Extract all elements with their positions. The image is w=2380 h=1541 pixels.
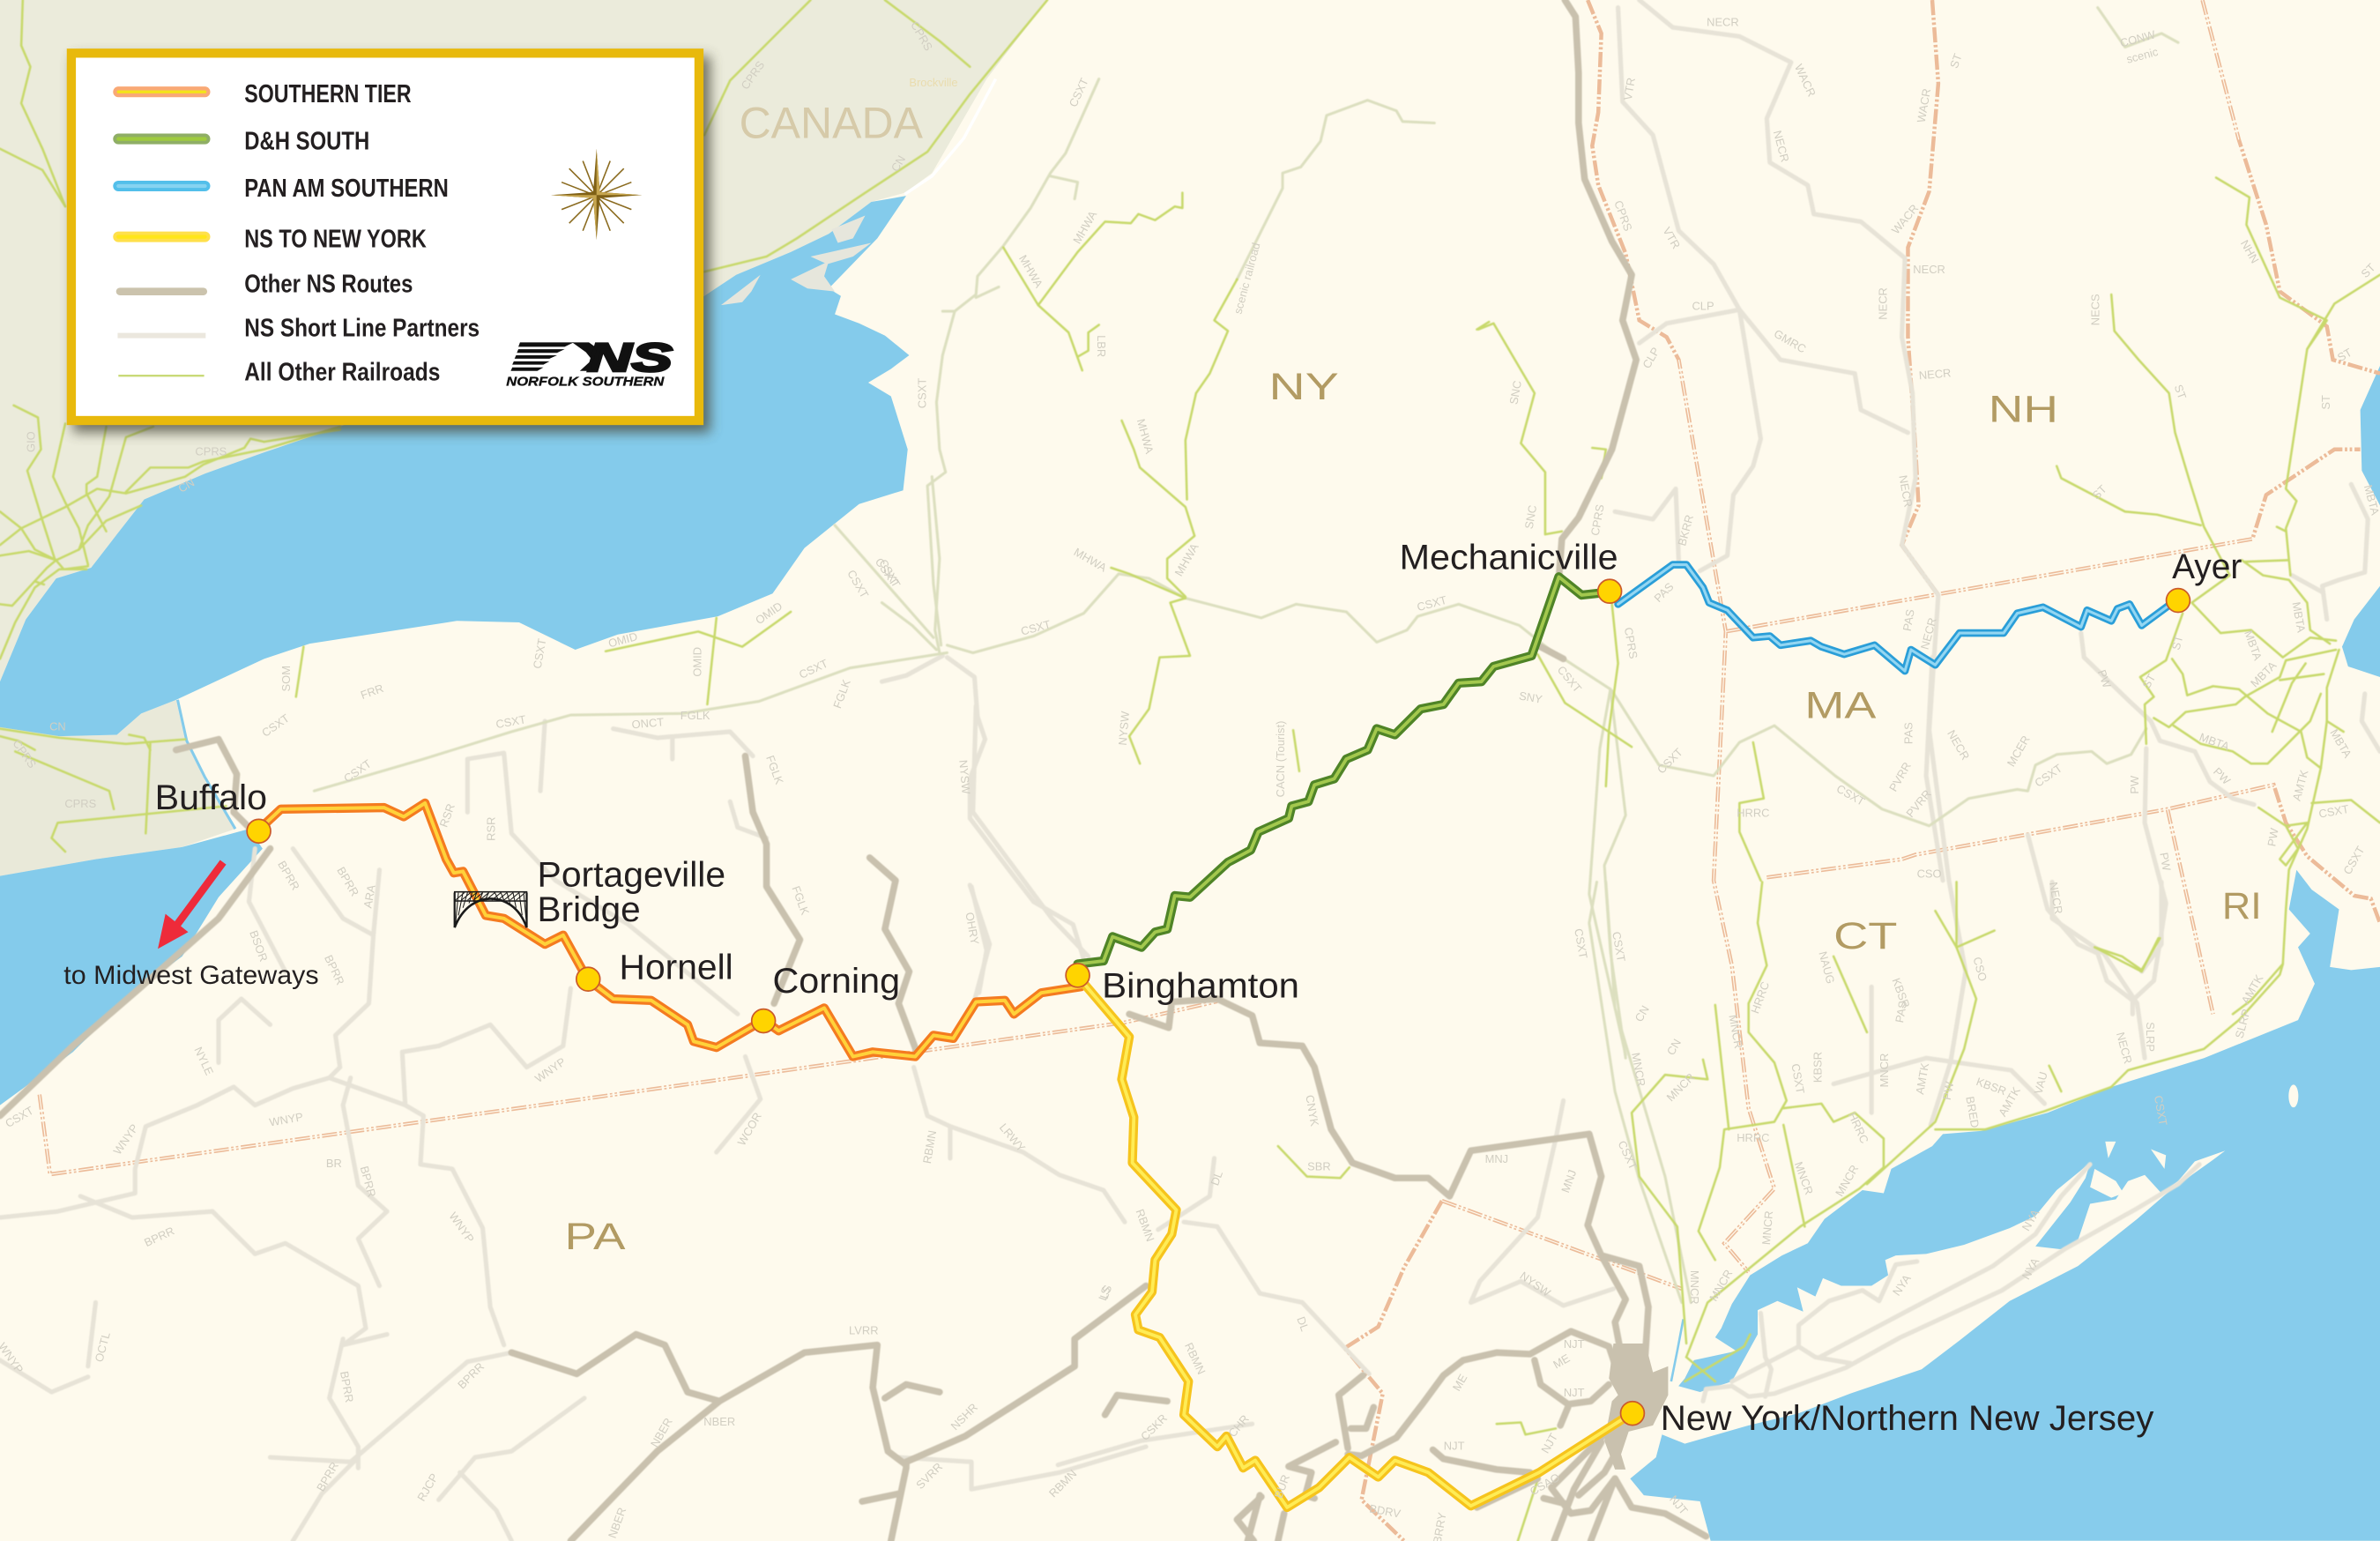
small railroad reporting-mark labels: FGLK bbox=[830, 677, 853, 711]
land: Long Island bbox=[1662, 1142, 2225, 1444]
small railroad reporting-mark labels: PVRR bbox=[1886, 760, 1914, 793]
small railroad reporting-mark labels: ST bbox=[2335, 346, 2354, 364]
small railroad reporting-mark labels: ME bbox=[1450, 1372, 1470, 1393]
label: Portageville: Portageville bbox=[538, 856, 725, 895]
small railroad reporting-mark labels: BUR bbox=[1272, 1473, 1292, 1500]
small railroad reporting-mark labels: NJT bbox=[1564, 1386, 1585, 1399]
small railroad reporting-mark labels: NAUG bbox=[1816, 950, 1837, 985]
small railroad reporting-mark labels: NECS bbox=[2088, 294, 2101, 325]
small railroad reporting-mark labels: NECR bbox=[1945, 727, 1972, 763]
Shelter Island area bbox=[2105, 1142, 2116, 1158]
small railroad reporting-mark labels: MNCR bbox=[1663, 1070, 1697, 1104]
small railroad reporting-mark labels: HRRC bbox=[1846, 1110, 1871, 1145]
small railroad reporting-mark labels: NYLE bbox=[191, 1045, 216, 1077]
small railroad reporting-mark labels: OHRY bbox=[963, 912, 982, 946]
label: CT: CT bbox=[1833, 915, 1897, 957]
small railroad reporting-mark labels: MHWA bbox=[1134, 417, 1157, 456]
label: Hornell: Hornell bbox=[620, 949, 733, 987]
small railroad reporting-mark labels: MCER bbox=[2004, 733, 2033, 769]
St. Lawrence shoreline highlight bbox=[904, 79, 996, 194]
small railroad reporting-mark labels: ST bbox=[2090, 482, 2109, 502]
small railroad reporting-mark labels: RJCP bbox=[414, 1471, 441, 1503]
small railroad reporting-mark labels: CSXT bbox=[1555, 663, 1584, 695]
small railroad reporting-mark labels: CSO bbox=[1970, 956, 1990, 983]
small railroad reporting-mark labels: RSR bbox=[436, 802, 457, 829]
legend panel bbox=[71, 53, 710, 433]
legend label: NS Short Line Partners: NS Short Line Partners bbox=[244, 314, 480, 342]
small railroad reporting-mark labels: NECR bbox=[1896, 474, 1915, 508]
small railroad reporting-mark labels: MBTA bbox=[2248, 659, 2280, 689]
icon: Portageville Bridge bbox=[455, 892, 527, 927]
small railroad reporting-mark labels: NECR bbox=[1876, 287, 1889, 320]
legend label: Pan Am Southern: PAN AM SOUTHERN bbox=[244, 175, 449, 203]
small railroad reporting-mark labels: RBMN bbox=[1134, 1207, 1157, 1243]
small railroad reporting-mark labels: NJT bbox=[1564, 1337, 1585, 1351]
route: Pan Am Southern bbox=[1618, 565, 2176, 671]
swatch: Other NS Routes bbox=[120, 289, 204, 294]
small railroad reporting-mark labels: BPRR bbox=[334, 865, 361, 898]
small railroad reporting-mark labels: OMID bbox=[606, 629, 639, 650]
swatch: D&H South bbox=[118, 136, 205, 142]
small railroad reporting-mark labels: OMID bbox=[753, 599, 785, 627]
small railroad reporting-mark labels: CSO bbox=[1917, 867, 1942, 880]
small railroad reporting-mark labels: CSXT bbox=[876, 557, 904, 590]
small railroad reporting-mark labels: FGLK bbox=[763, 754, 786, 786]
small railroad reporting-mark labels: SOM bbox=[279, 666, 293, 691]
small railroad reporting-mark labels: BR bbox=[326, 1157, 342, 1170]
small railroad reporting-mark labels: RBMN bbox=[1046, 1467, 1079, 1500]
small railroad reporting-mark labels: WACR bbox=[1889, 202, 1921, 236]
small railroad reporting-mark labels: WCOR bbox=[734, 1110, 764, 1148]
small railroad reporting-mark labels: OCTL bbox=[92, 1330, 113, 1364]
small railroad reporting-mark labels: SNY bbox=[1518, 689, 1543, 706]
route: D&H South bbox=[1078, 577, 1609, 964]
label: to Midwest Gateways: to Midwest Gateways bbox=[63, 962, 319, 990]
label: Mechanicville: Mechanicville bbox=[1400, 539, 1618, 577]
small railroad reporting-mark labels: NJT bbox=[1667, 1493, 1691, 1517]
small railroad reporting-mark labels: CSXT bbox=[915, 378, 928, 408]
small railroad reporting-mark labels: NECR bbox=[1918, 366, 1952, 382]
small railroad reporting-mark labels: CSXT bbox=[1019, 617, 1052, 638]
logo stripes bbox=[510, 342, 574, 371]
small railroad reporting-mark labels: HRRC bbox=[1748, 979, 1772, 1016]
small railroad reporting-mark labels: FRR bbox=[359, 681, 385, 702]
small railroad reporting-mark labels: Brockville bbox=[909, 76, 958, 89]
region: Canada near Buffalo bbox=[0, 700, 235, 876]
icon: compass rose bbox=[551, 149, 642, 240]
small railroad reporting-mark labels: WNYP bbox=[268, 1110, 304, 1129]
small railroad reporting-mark labels: DL bbox=[1294, 1314, 1312, 1333]
small railroad reporting-mark labels: PAS bbox=[1902, 722, 1915, 744]
small railroad reporting-mark labels: VTR bbox=[1621, 77, 1638, 101]
small railroad reporting-mark labels: CSXT bbox=[2317, 802, 2350, 821]
small railroad reporting-mark labels: CSXT bbox=[1834, 782, 1867, 808]
small railroad reporting-mark labels: LS bbox=[1097, 1283, 1114, 1301]
small railroad reporting-mark labels: NJT bbox=[1444, 1439, 1465, 1452]
small railroad reporting-mark labels: CPRS bbox=[908, 19, 935, 53]
small railroad reporting-mark labels: MNCR bbox=[1726, 1014, 1745, 1050]
small railroad reporting-mark labels: MNCR bbox=[1792, 1160, 1816, 1196]
small railroad reporting-mark labels: CN bbox=[1664, 1037, 1684, 1057]
small railroad reporting-mark labels: CPRS bbox=[1611, 198, 1635, 234]
small railroad reporting-mark labels: WNYP bbox=[446, 1210, 477, 1245]
small railroad reporting-mark labels: RSR bbox=[484, 817, 497, 841]
small railroad reporting-mark labels: CLP bbox=[1692, 299, 1714, 312]
small railroad reporting-mark labels: CSKR bbox=[1138, 1411, 1170, 1443]
small railroad reporting-mark labels: CSXT bbox=[531, 637, 548, 670]
small railroad reporting-mark labels: NYA bbox=[2019, 1207, 2042, 1233]
logo: Norfolk Southern bbox=[506, 335, 673, 389]
small railroad reporting-mark labels: WACR bbox=[1915, 87, 1933, 123]
rail hub: New York metro bbox=[1604, 1344, 1668, 1470]
region: Canada north of Lake Ontario bbox=[0, 0, 1047, 681]
small railroad reporting-mark labels: CSXT bbox=[873, 555, 901, 588]
small railroad reporting-mark labels: BPRR bbox=[275, 859, 302, 892]
small railroad reporting-mark labels: MNCR bbox=[1833, 1163, 1861, 1199]
small railroad reporting-mark labels: KBSR bbox=[1975, 1075, 2008, 1098]
small railroad reporting-mark labels: NECR bbox=[1913, 263, 1945, 276]
small railroad reporting-mark labels: BPRR bbox=[455, 1359, 487, 1391]
small railroad reporting-mark labels: PVRR bbox=[1903, 787, 1934, 820]
small railroad reporting-mark labels: CSXT bbox=[844, 568, 872, 600]
small railroad reporting-mark labels: CHR bbox=[1225, 1412, 1252, 1440]
label: Buffalo: Buffalo bbox=[155, 778, 267, 817]
islands in Peconic Bay bbox=[2090, 1169, 2123, 1198]
swatch: NS to New York bbox=[118, 234, 205, 240]
small railroad reporting-mark labels: BPRR bbox=[142, 1224, 176, 1249]
small railroad reporting-mark labels: CPRS bbox=[195, 445, 227, 458]
small railroad reporting-mark labels: CONW bbox=[2118, 27, 2158, 49]
legend label: NS to New York: NS TO NEW YORK bbox=[244, 226, 427, 254]
small railroad reporting-mark labels: GIO bbox=[25, 431, 38, 452]
small railroad reporting-mark labels: ARA bbox=[361, 883, 378, 909]
small railroad reporting-mark labels: ST bbox=[2172, 383, 2189, 401]
small railroad reporting-mark labels: BPRR bbox=[338, 1370, 356, 1403]
small railroad reporting-mark labels: ST bbox=[2169, 634, 2185, 651]
small railroad reporting-mark labels: NYA bbox=[1890, 1272, 1914, 1298]
small railroad reporting-mark labels: ST bbox=[2139, 672, 2158, 691]
label: Bridge: Bridge bbox=[538, 890, 641, 929]
small railroad reporting-mark labels: MBTA bbox=[2242, 629, 2265, 662]
small railroad reporting-mark labels: BPRR bbox=[322, 953, 347, 987]
small railroad reporting-mark labels: RBMN bbox=[1182, 1341, 1209, 1376]
city labels bbox=[63, 539, 2242, 1438]
small railroad reporting-mark labels: SBR bbox=[1307, 1160, 1331, 1173]
small railroad reporting-mark labels: MNCR bbox=[1759, 1210, 1775, 1246]
small railroad reporting-mark labels: SNC bbox=[1522, 504, 1539, 530]
small railroad reporting-mark labels: WNYP bbox=[532, 1055, 568, 1085]
small railroad reporting-mark labels: MNCR bbox=[1878, 1053, 1891, 1087]
label: Ayer: Ayer bbox=[2172, 547, 2242, 586]
small railroad reporting-mark labels: CN bbox=[1633, 1003, 1652, 1024]
logo locomotive wedge bbox=[572, 342, 603, 371]
rail network: pale CSXT lines bbox=[314, 8, 2178, 1302]
small railroad reporting-mark labels: NBER bbox=[648, 1416, 675, 1449]
logo wordmark: NORFOLK SOUTHERN bbox=[506, 375, 665, 389]
label: NY: NY bbox=[1269, 366, 1339, 408]
small railroad reporting-mark labels: KBSR bbox=[1811, 1052, 1824, 1083]
small railroad reporting-mark labels: VAU bbox=[2032, 1070, 2050, 1096]
water: Atlantic Ocean and Long Island Sound bbox=[1630, 366, 2380, 1541]
legend label: All Other Railroads: All Other Railroads bbox=[244, 358, 440, 386]
small railroad reporting-mark labels: NYA bbox=[2019, 1255, 2042, 1282]
small railroad reporting-mark labels: MHWA bbox=[1016, 252, 1045, 290]
label: Binghamton: Binghamton bbox=[1102, 966, 1299, 1005]
small railroad reporting-mark labels: MBTA bbox=[2327, 726, 2354, 760]
small railroad reporting-mark labels: SLRP bbox=[2233, 1008, 2253, 1039]
arrow: to Midwest Gateways bbox=[158, 862, 223, 949]
legend label: Southern Tier: SOUTHERN TIER bbox=[244, 80, 412, 108]
small railroad reporting-mark labels: CSXT bbox=[1789, 1062, 1807, 1095]
label: NH: NH bbox=[1989, 389, 2058, 431]
small railroad reporting-mark labels: CN bbox=[49, 719, 66, 733]
small railroad reporting-mark labels: PW bbox=[2157, 852, 2174, 873]
small railroad reporting-mark labels: SLRP bbox=[2144, 1022, 2157, 1052]
route: Southern Tier bbox=[258, 803, 1081, 1056]
small railroad reporting-mark labels: NHN bbox=[2238, 237, 2262, 265]
small railroad reporting-mark labels: MNCR bbox=[1629, 1052, 1648, 1088]
small railroad reporting-mark labels: NYSW bbox=[956, 759, 973, 795]
small railroad reporting-mark labels: NECR bbox=[2047, 881, 2065, 915]
small railroad reporting-mark labels: SNC bbox=[1506, 380, 1524, 406]
small railroad reporting-mark labels: CSXT bbox=[2152, 1094, 2170, 1127]
water: Niagara River bbox=[177, 700, 235, 829]
small railroad reporting-mark labels: DL bbox=[1208, 1169, 1225, 1187]
small railroad reporting-mark labels: PW bbox=[2128, 775, 2141, 794]
small railroad reporting-mark labels: CSXT bbox=[797, 657, 830, 681]
small railroad reporting-mark labels: BPRR bbox=[314, 1460, 341, 1493]
small railroad reporting-mark labels: CSXT bbox=[495, 712, 527, 731]
label: RI: RI bbox=[2222, 885, 2262, 927]
small railroad reporting-mark labels: NBER bbox=[703, 1415, 735, 1428]
small railroad reporting-mark labels: SVRR bbox=[913, 1460, 945, 1492]
small railroad reporting-mark labels: CNYK bbox=[1303, 1094, 1321, 1128]
small railroad reporting-mark labels: MNJ bbox=[1485, 1152, 1508, 1165]
swatch: Southern Tier bbox=[118, 89, 205, 95]
small railroad reporting-mark labels: CSXT bbox=[2032, 762, 2064, 790]
Gardiners Island bbox=[2151, 1150, 2166, 1169]
small railroad reporting-mark labels: HRRC bbox=[1737, 806, 1769, 819]
small railroad reporting-mark labels: FGLK bbox=[681, 709, 710, 722]
water: Lake Erie bbox=[0, 829, 263, 1106]
small railroad reporting-mark labels: FGLK bbox=[789, 884, 812, 917]
small railroad reporting-mark labels: CSXT bbox=[1416, 593, 1448, 614]
small railroad reporting-mark labels: scenic bbox=[2125, 45, 2160, 66]
legend label: Other NS Routes: Other NS Routes bbox=[244, 271, 413, 299]
logo NS lettering: NS bbox=[587, 335, 673, 380]
small railroad reporting-mark labels: BPRR bbox=[358, 1165, 378, 1199]
label: Corning: Corning bbox=[772, 962, 900, 1001]
small railroad reporting-mark labels: LBR bbox=[1095, 335, 1108, 357]
small railroad reporting-mark labels: MNCR bbox=[1688, 1270, 1701, 1305]
small railroad reporting-mark labels: CN bbox=[889, 153, 908, 174]
small railroad reporting-mark labels: CSXT bbox=[1610, 930, 1628, 963]
small railroad reporting-mark labels: PW bbox=[1940, 1080, 1956, 1101]
swatch: All Other Railroads bbox=[118, 375, 205, 376]
region labels bbox=[565, 99, 2262, 1258]
label: New York/Northern New Jersey: New York/Northern New Jersey bbox=[1661, 1399, 2154, 1438]
small railroad reporting-mark labels: NECR bbox=[2114, 1031, 2135, 1065]
small railroad reporting-mark labels: GMRC bbox=[1772, 327, 1809, 355]
label: PA: PA bbox=[565, 1216, 626, 1258]
small railroad reporting-mark labels: PW bbox=[2265, 826, 2281, 847]
small railroad reporting-mark labels: NBER bbox=[606, 1506, 628, 1540]
small railroad reporting-mark labels: MNJ bbox=[1558, 1168, 1579, 1195]
small railroad reporting-mark labels: NECR bbox=[1707, 15, 1739, 28]
small railroad reporting-mark labels: scenic railroad bbox=[1231, 242, 1263, 316]
legend shadow bbox=[73, 56, 710, 433]
small railroad reporting-mark labels: NECR bbox=[1918, 616, 1939, 651]
small railroad reporting-mark labels: CPRS bbox=[64, 797, 97, 810]
small railroad reporting-mark labels: LVRR bbox=[849, 1324, 879, 1337]
small railroad reporting-mark labels: MHWA bbox=[1172, 540, 1201, 578]
small railroad reporting-mark labels: AMTK bbox=[1996, 1084, 2023, 1119]
small railroad reporting-mark labels: ST bbox=[1947, 52, 1965, 70]
small railroad reporting-mark labels: CPRS bbox=[738, 58, 767, 92]
small railroad reporting-mark labels: ST bbox=[2358, 261, 2378, 280]
small railroad reporting-mark labels: VTR bbox=[1660, 225, 1683, 251]
small railroad reporting-mark labels: ONCT bbox=[631, 715, 665, 731]
small railroad reporting-mark labels: CSXT bbox=[1655, 745, 1685, 776]
rail network: other NS routes bbox=[0, 0, 1706, 1541]
small railroad reporting-mark labels: AMTK bbox=[2290, 768, 2311, 802]
legend frame bbox=[71, 53, 699, 421]
label: CANADA: CANADA bbox=[740, 99, 924, 148]
small railroad reporting-mark labels: OMID bbox=[691, 647, 704, 677]
markers: city nodes bbox=[247, 579, 2190, 1426]
small railroad reporting-mark labels: CSXT bbox=[2340, 844, 2367, 876]
small railroad reporting-mark labels: LS bbox=[1096, 1284, 1113, 1302]
legend labels bbox=[244, 80, 480, 386]
small railroad reporting-mark labels: CLP bbox=[1640, 345, 1662, 371]
small railroad reporting-mark labels: MBTA bbox=[2290, 601, 2308, 634]
small railroad reporting-mark labels: CSXT bbox=[1572, 927, 1590, 960]
small railroad reporting-mark labels: CSXT bbox=[341, 756, 374, 785]
small railroad reporting-mark labels: AMTK bbox=[2238, 972, 2266, 1006]
small railroad reporting-mark labels: BKRR bbox=[1675, 513, 1696, 547]
small railroad reporting-mark labels: RBMN bbox=[920, 1129, 939, 1165]
small railroad reporting-mark labels: ME bbox=[1551, 1351, 1573, 1371]
small railroad reporting-mark labels: NYSW bbox=[1116, 710, 1132, 746]
small railroad reporting-mark labels: NYSW bbox=[1518, 1269, 1554, 1299]
small railroad reporting-mark labels: MBTA bbox=[2198, 730, 2231, 753]
swatch: NS Short Line Partners bbox=[117, 334, 205, 337]
small railroad reporting-mark labels: CSXT bbox=[3, 1104, 36, 1130]
small railroad reporting-mark labels: NECR bbox=[1771, 129, 1792, 164]
small railroad reporting-mark labels: CSXT bbox=[1067, 76, 1091, 109]
swatch: Pan Am Southern bbox=[118, 182, 205, 189]
small railroad reporting-mark labels: ST bbox=[2319, 395, 2332, 410]
small railroad reporting-mark labels: CPRS bbox=[10, 737, 39, 770]
small railroad reporting-mark labels: NSHR bbox=[948, 1401, 980, 1433]
small railroad reporting-mark labels: CSXT bbox=[259, 711, 292, 740]
small railroad reporting-mark labels: CSAO bbox=[1528, 1470, 1562, 1498]
small railroad reporting-mark labels: PW bbox=[2095, 668, 2114, 690]
water: Lake Ontario bbox=[0, 196, 909, 736]
small railroad reporting-mark labels: BSOR bbox=[247, 928, 271, 964]
small railroad reporting-mark labels: CN bbox=[175, 475, 197, 495]
small railroad reporting-mark labels: WACR bbox=[1792, 62, 1818, 99]
small railroad reporting-mark labels: KBSR bbox=[1890, 976, 1913, 1009]
small railroad reporting-mark labels: PAS bbox=[1900, 608, 1917, 632]
small railroad reporting-mark labels: CPRS bbox=[1588, 503, 1607, 537]
small railroad reporting-mark labels: NJT bbox=[1538, 1431, 1560, 1455]
small railroad reporting-mark labels: LRWY bbox=[997, 1120, 1028, 1155]
legend label: D&H South: D&H SOUTH bbox=[244, 128, 369, 156]
small railroad reporting-mark labels: PW bbox=[2211, 765, 2234, 787]
route: NS to New York bbox=[1078, 976, 1632, 1508]
small railroad reporting-mark labels: MHWA bbox=[1070, 208, 1100, 246]
small railroad reporting-mark labels: BDRV bbox=[1368, 1502, 1402, 1521]
small railroad reporting-mark labels: HRRC bbox=[1737, 1131, 1769, 1144]
small railroad reporting-mark labels: AMTK bbox=[1913, 1061, 1931, 1096]
small railroad reporting-mark labels: WNYP bbox=[110, 1121, 141, 1158]
small railroad reporting-mark labels: BRED bbox=[1963, 1095, 1982, 1128]
small railroad reporting-mark labels: CACN (Tourist) bbox=[1274, 721, 1287, 797]
small railroad reporting-mark labels: PAS bbox=[1893, 1000, 1909, 1024]
small railroad reporting-mark labels: CSXT bbox=[1615, 1138, 1640, 1172]
small railroad reporting-mark labels: PAS bbox=[1651, 579, 1677, 605]
small railroad reporting-mark labels: MHWA bbox=[1072, 545, 1109, 575]
label: MA: MA bbox=[1804, 685, 1877, 727]
small railroad reporting-mark labels: CPRS bbox=[1622, 626, 1640, 660]
small railroad reporting-mark labels: MNCR bbox=[1707, 1267, 1735, 1303]
